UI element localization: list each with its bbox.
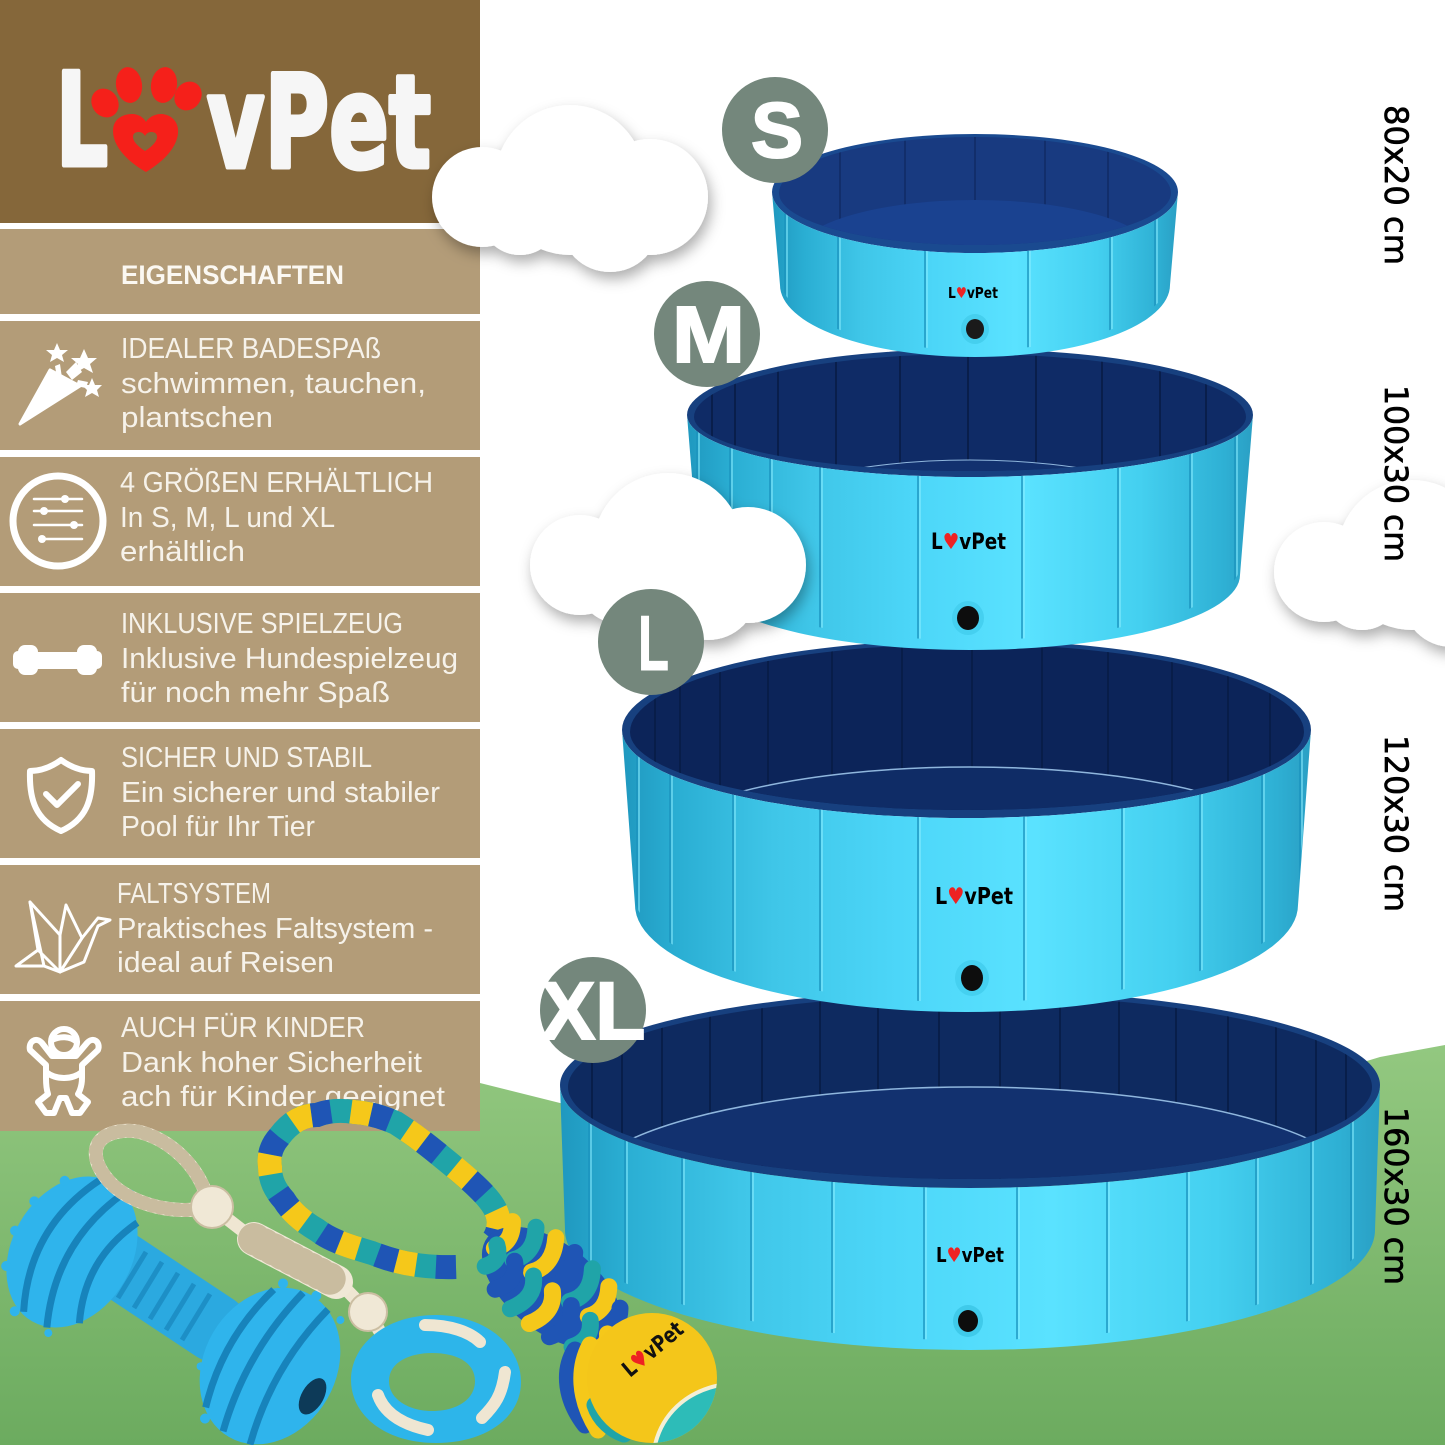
text: sicher und stabil: Pool für Ihr Tier	[121, 811, 315, 843]
text: idealer Badespass: schwimmen, tauchen,	[121, 368, 426, 400]
text: vier Groessen: 4 GRÖßEN ERHÄLTLICH	[120, 467, 433, 499]
valve on L pool	[955, 960, 989, 996]
dimension label: 160x30 cm: 160x30 cm	[1377, 1107, 1415, 1285]
logo on S pool: L♥vPet	[948, 284, 998, 302]
rope loop	[269, 1111, 499, 1267]
green meadow background	[0, 1045, 1445, 1445]
icon: sliders in circle	[13, 476, 103, 566]
valve on M pool	[952, 601, 984, 635]
icon: red paw heart	[86, 65, 207, 172]
text: idealer Badespass: IDEALER BADESPAß	[121, 333, 381, 365]
text: vier Groessen: In S, M, L und XL	[120, 502, 335, 534]
text: inklusive Spielzeug	[121, 608, 458, 709]
logo: LovPet: L	[56, 47, 108, 196]
panel: heading Eigenschaften	[0, 229, 480, 314]
badge: S	[722, 77, 828, 183]
icon: baby	[30, 1029, 99, 1113]
panel: idealer Badespass	[0, 321, 480, 450]
rope knot	[460, 1203, 644, 1373]
valve on S pool	[961, 314, 989, 344]
lower rope strands behind ball	[567, 1345, 624, 1434]
panel: sicher und stabil	[0, 729, 480, 858]
logo on XL pool: L♥vPet	[936, 1243, 1004, 1267]
text: auch fuer Kinder: ach für Kinder geeignet	[121, 1081, 445, 1113]
text: Faltsystem	[117, 878, 433, 979]
text: idealer Badespass	[121, 333, 426, 434]
cloud: right	[1274, 480, 1445, 647]
text: Faltsystem: ideal auf Reisen	[117, 947, 334, 979]
text: auch fuer Kinder: AUCH FÜR KINDER	[121, 1012, 365, 1044]
logo: LovPet: vPet	[207, 49, 431, 198]
dimension label: 120x30 cm: 120x30 cm	[1377, 735, 1415, 912]
text: vier Groessen: erhältlich	[120, 536, 245, 568]
icon: bone	[13, 645, 102, 675]
cloud: middle	[530, 473, 806, 640]
badge: XL: XL	[541, 966, 645, 1057]
tennis ball	[587, 1313, 720, 1445]
tennis ball: L♥vPet	[618, 1317, 689, 1383]
text: sicher und stabil	[121, 742, 440, 843]
pool: M	[687, 349, 1253, 650]
badge: L	[598, 589, 704, 695]
dimension label: 80x20 cm: 80x20 cm	[1377, 105, 1415, 265]
toy: blue rubber dumbbell	[0, 1144, 372, 1445]
panel: Faltsystem	[0, 865, 480, 994]
text: inklusive Spielzeug: INKLUSIVE SPIELZEUG	[121, 608, 403, 640]
cloud: top	[432, 105, 708, 272]
text: idealer Badespass: plantschen	[121, 402, 273, 434]
text: Faltsystem: FALTSYSTEM	[117, 878, 271, 910]
text: inklusive Spielzeug: Inklusive Hundespielzeug	[121, 643, 458, 675]
badge: S: S	[751, 86, 803, 174]
text: auch fuer Kinder	[121, 1012, 445, 1113]
toy: beige rope with ring	[96, 1131, 521, 1443]
text: auch fuer Kinder: Dank hoher Sicherheit	[121, 1047, 422, 1079]
icon: shield with check	[30, 760, 92, 831]
text: Faltsystem: Praktisches Faltsystem -	[117, 913, 433, 945]
panel: vier Groessen	[0, 457, 480, 586]
pool: L	[622, 640, 1311, 1012]
panel: auch fuer Kinder	[0, 1001, 480, 1131]
panel: heading Eigenschaften: EIGENSCHAFTEN	[121, 260, 344, 290]
valve on XL pool	[953, 1305, 983, 1337]
panel: brand header	[0, 0, 480, 223]
blue ring	[351, 1315, 521, 1443]
logo on M pool: L♥vPet	[931, 530, 1006, 555]
icon: party popper	[20, 343, 102, 424]
toy: twisted rope with tennis ball	[269, 1111, 720, 1445]
text: vier Groessen	[120, 467, 433, 568]
logo on L pool: L♥vPet	[935, 884, 1013, 910]
rope loop and braid	[96, 1131, 387, 1340]
badge: M	[654, 281, 760, 387]
dimension label: 100x30 cm: 100x30 cm	[1377, 385, 1415, 562]
pool: XL	[560, 990, 1380, 1350]
badge: M: M	[672, 290, 745, 379]
badge: L: L	[638, 599, 669, 687]
logo: LovPet	[56, 47, 431, 198]
text: sicher und stabil: SICHER UND STABIL	[121, 742, 372, 774]
text: sicher und stabil: Ein sicherer und stabiler	[121, 777, 440, 809]
icon: origami crane	[16, 902, 110, 972]
panel: inklusive Spielzeug	[0, 593, 480, 722]
text: inklusive Spielzeug: für noch mehr Spaß	[121, 677, 390, 709]
pool: S	[772, 130, 1178, 360]
